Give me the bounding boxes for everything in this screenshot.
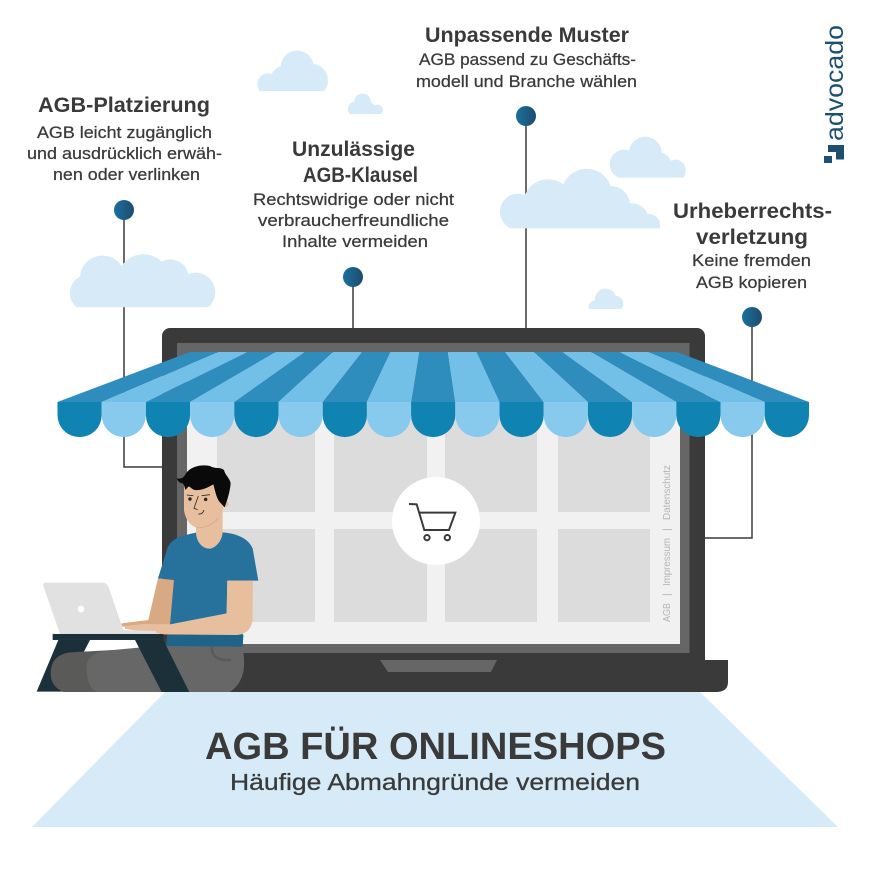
neck <box>196 507 223 549</box>
pin 2 <box>343 267 363 287</box>
text block: AGB-Platzierung <box>27 94 222 184</box>
text block: AGB-Platzierung: nen oder verlinken <box>53 166 200 184</box>
far arm <box>122 578 174 627</box>
footer links: AGB <box>661 603 673 622</box>
table top <box>53 634 163 640</box>
person with laptop at table <box>37 465 258 692</box>
logo: advocado: advocado <box>821 25 849 141</box>
text block: Unpassende Muster: AGB passend zu Geschäfts- <box>419 51 636 69</box>
back leg of trousers <box>51 650 113 692</box>
footer links: Datenschutz <box>661 465 673 520</box>
text block: Urheberrechtsverletzung <box>673 200 832 292</box>
text block: AGB-Platzierung: und ausdrücklich erwäh- <box>27 145 222 163</box>
text block: Unpassende Muster <box>416 24 637 91</box>
awning scallops <box>58 402 809 437</box>
footer links: Impressum <box>661 538 673 586</box>
jaw shadow <box>197 518 218 528</box>
text block: Unzulässige AGB-Klausel <box>253 138 454 251</box>
ear <box>223 501 229 507</box>
cloud 5 <box>610 137 686 178</box>
text block: Unpassende Muster: modell und Branche wählen <box>416 73 637 91</box>
text block: Urheberrechtsverletzung: verletzung <box>696 226 808 249</box>
near arm <box>125 581 253 635</box>
connector lines <box>124 116 752 538</box>
laptop bezel <box>177 343 690 653</box>
text block: Unzulässige AGB-Klausel: Rechtswidrige oder nicht <box>253 191 454 209</box>
laptop base <box>200 660 728 692</box>
text block: Urheberrechtsverletzung: Keine fremden <box>692 252 811 270</box>
face <box>184 483 224 528</box>
awning <box>58 352 809 437</box>
text block: Unzulässige AGB-Klausel: verbraucherfreundliche <box>258 212 449 230</box>
awning stripes <box>58 352 809 402</box>
icon: cart <box>409 504 455 540</box>
connector 1 <box>124 210 165 467</box>
text block: Unzulässige AGB-Klausel: Unzulässige <box>292 138 415 161</box>
pins <box>114 106 762 327</box>
text block: Urheberrechtsverletzung: AGB kopieren <box>696 274 807 292</box>
connector 4 <box>703 317 752 538</box>
table front leg <box>135 640 189 692</box>
table back leg <box>37 640 90 692</box>
footer links: | <box>661 593 673 596</box>
text block: Unzulässige AGB-Klausel: Inhalte vermeiden <box>282 233 428 251</box>
text block: AGB-Platzierung: AGB-Platzierung <box>38 94 210 117</box>
cart badge <box>392 477 480 565</box>
hair <box>177 465 231 507</box>
clouds <box>70 51 686 309</box>
shirt shadow <box>166 634 243 647</box>
pocket <box>212 647 231 660</box>
connector 2 <box>352 277 354 330</box>
shop window panes <box>217 400 650 622</box>
text block: AGB-Platzierung: AGB leicht zugänglich <box>37 124 212 142</box>
subtitle: Häufige Abmahngründe vermeiden <box>230 769 640 795</box>
cloud 6 <box>588 289 623 309</box>
pin 1 <box>114 200 134 220</box>
cloud 4 <box>500 169 660 228</box>
footer links: | <box>661 528 673 531</box>
shirt <box>158 532 258 647</box>
pin 3 <box>516 106 536 126</box>
front leg of trousers <box>87 645 244 692</box>
pin 4 <box>742 307 762 327</box>
laptop <box>162 328 728 692</box>
floor trapezoid <box>32 692 838 827</box>
facial features <box>187 495 210 514</box>
notebook logo <box>78 606 84 612</box>
cloud 2 <box>257 51 328 91</box>
text block: Unpassende Muster: Unpassende Muster <box>425 24 629 47</box>
notebook <box>43 583 156 634</box>
text block: Urheberrechtsverletzung: Urheberrechts- <box>673 200 832 223</box>
laptop lid <box>162 328 705 668</box>
footer links <box>661 465 673 622</box>
cloud 1 <box>70 254 215 307</box>
cloud 3 <box>348 93 383 114</box>
title: AGB FÜR ONLINESHOPS <box>205 725 666 768</box>
connector 3 <box>525 116 527 330</box>
laptop notch <box>380 660 497 672</box>
text block: Unzulässige AGB-Klausel: AGB-Klausel <box>303 164 418 187</box>
screen <box>187 353 680 644</box>
